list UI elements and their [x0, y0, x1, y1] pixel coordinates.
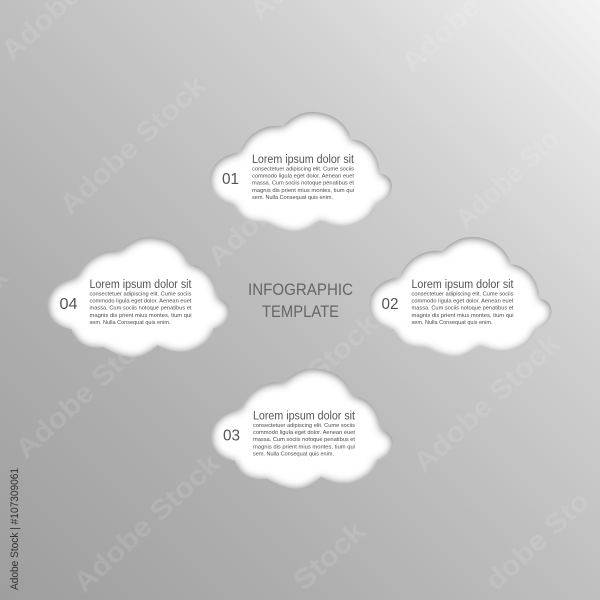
watermarks: Adobe Stock [201, 121, 360, 272]
cloud 02 [370, 237, 552, 357]
number 02: 02 [382, 296, 399, 313]
watermarks: Adobe Stock [53, 69, 212, 220]
text block 01 [252, 154, 355, 201]
watermarks: Adobe Stock [407, 327, 566, 478]
text block 03: commodo ligula eget dolor. Aenean euet [253, 430, 355, 436]
text block 02: massa. Cum sociis notoque penatibus et [412, 306, 514, 312]
watermarks: Stock [287, 515, 371, 596]
text block 04: magnis dis prient mius montes, tium qui [90, 313, 192, 319]
text block 01: massa. Cum sociis notoque penatibus et [252, 180, 354, 186]
text block 01: sem. Nulla Consequat quis enim. [252, 195, 333, 201]
text block 03: Lorem ipsum dolor sit [253, 410, 356, 422]
text block 04: Lorem ipsum dolor sit [90, 279, 192, 291]
watermarks: dobe Sto [479, 485, 595, 596]
text block 02: magnis dis prient mius montes, tium qui [412, 313, 514, 319]
text block 04: consectetuer adipiscing elit. Cume sociis [90, 292, 192, 298]
watermarks: Adobe Stock [9, 313, 168, 464]
centre title: INFOGRAPHIC [248, 280, 353, 299]
watermarks: Adobe Sto [449, 123, 565, 234]
text block 01: Lorem ipsum dolor sit [252, 154, 355, 166]
text block 03 [253, 410, 356, 458]
cloud 03 [211, 368, 393, 488]
text block 02: consectetuer adipiscing elit. Cume sociis [412, 292, 514, 298]
centre title: TEMPLATE [262, 302, 339, 321]
text block 03: consectetuer adipiscing elit. Cume sociis [253, 423, 355, 429]
text block 04: commodo ligula eget dolor. Aenean euet [90, 298, 192, 304]
number 03: 03 [223, 428, 240, 444]
text block 03: massa. Cum sociis notoque penatibus et [253, 437, 355, 443]
watermarks: Adobe Stock [67, 447, 226, 598]
text block 04: sem. Nulla Consequat quis enim. [90, 320, 171, 326]
text block 01: consectetuer adipiscing elit. Cume sociis [252, 166, 354, 172]
text block 01: commodo ligula eget dolor. Aenean euet [252, 174, 354, 180]
text block 04 [90, 279, 192, 326]
stock id caption: Adobe Stock | #107309061 [9, 468, 21, 590]
text block 02: sem. Nulla Consequat quis enim. [412, 320, 493, 326]
text block 02: commodo ligula eget dolor. Aenean euet [412, 298, 514, 304]
cloud 04 [48, 237, 230, 357]
cloud 01 [210, 112, 392, 232]
number 04: 04 [60, 296, 78, 313]
centre title [248, 280, 353, 321]
watermarks: Adobe Stock [225, 307, 384, 458]
text block 03: magnis dis prient mius montes, tium qui [253, 444, 355, 450]
text block 01: magnis dis prient mius montes, tium qui [252, 188, 354, 194]
text block 02: Lorem ipsum dolor sit [412, 279, 514, 291]
text block 02 [412, 279, 514, 326]
number 01: 01 [222, 171, 239, 188]
text block 04: massa. Cum sociis notoque penatibus et [90, 306, 192, 312]
text block 03: sem. Nulla Consequat quis enim. [253, 452, 334, 458]
